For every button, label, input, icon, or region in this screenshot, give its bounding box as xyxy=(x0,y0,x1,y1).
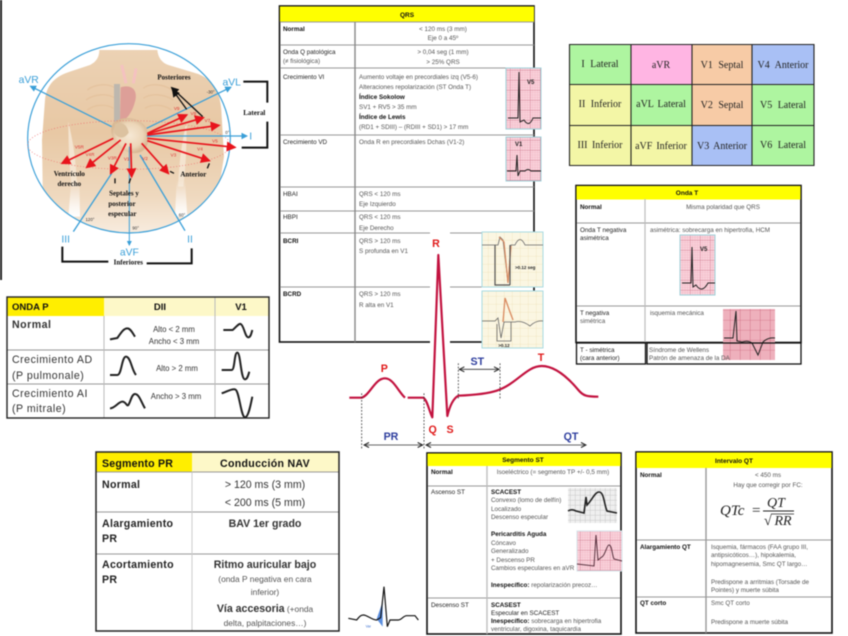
Onda P row labels: Normal xyxy=(12,319,52,331)
grid labels: V3 Anterior xyxy=(697,141,748,152)
Intervalo QT content: Predispone a arritmias (Torsade de xyxy=(711,579,809,586)
Onda P criteria xyxy=(149,325,201,401)
vector and angle tags: V3 xyxy=(170,153,177,158)
vector and angle tags: V5R xyxy=(75,145,84,150)
horizontal plane ellipse xyxy=(28,121,230,169)
vector and angle tags: -30° xyxy=(207,90,215,95)
Onda P row labels: Crecimiento AD xyxy=(12,354,93,366)
grid labels: V1 Septal xyxy=(701,60,744,71)
Segmento ST content: ventricular, digoxina, taquicardia xyxy=(491,626,581,633)
Segmento ST content: SCASEST xyxy=(491,602,521,609)
grid labels: aVL Lateral xyxy=(636,99,686,110)
lead labels xyxy=(19,75,252,259)
Onda T content: isquemia mecánica xyxy=(650,310,704,317)
territory labels: Inferiores xyxy=(114,259,143,267)
QRS row content: Alteraciones repolarización (ST Onda T) xyxy=(359,84,471,91)
Segmento ST content: Cóncavo xyxy=(491,540,516,547)
Segmento PR content: delta, palpitaciones…) xyxy=(224,618,307,628)
interval guides xyxy=(362,363,586,448)
ECG thumbnail: right ventricular growth: V1 xyxy=(515,142,523,148)
Segmento ST content: Convexo (lomo de delfín) xyxy=(491,497,561,504)
Onda T content: Onda T negativa xyxy=(580,227,627,234)
header row xyxy=(7,297,269,316)
grid labels: II Inferior xyxy=(579,99,622,110)
grid labels: I Lateral xyxy=(581,59,619,70)
QRS row labels xyxy=(283,26,336,298)
Segmento ST content: Descenso ST xyxy=(431,602,469,609)
row: T simétrica: Síndrome de Wellens xyxy=(649,347,709,354)
lead labels: I xyxy=(249,132,252,143)
Onda T content: T negativa xyxy=(580,310,610,317)
Segmento ST content xyxy=(431,469,609,633)
Segmento PR content: Ritmo auricular bajo xyxy=(214,559,317,571)
grid labels xyxy=(577,59,809,152)
inferior bracket xyxy=(62,247,192,263)
precordial vectors xyxy=(62,115,235,177)
Segmento PR content: (onda P negativa en cara xyxy=(218,574,312,584)
grid labels: V5 Lateral xyxy=(760,100,806,111)
panel: Segmento ST table xyxy=(427,453,622,634)
QRS row content: QRS > 120 ms xyxy=(359,238,400,245)
heading: Onda T: Onda T xyxy=(676,190,698,197)
heading: Intervalo QT xyxy=(636,452,832,468)
panel: lead territory grid xyxy=(570,44,814,166)
Segmento PR content: < 200 ms (5 mm) xyxy=(225,497,305,509)
vector and angle tags: V4 xyxy=(197,147,203,152)
Onda T content: Normal xyxy=(580,204,602,211)
white gap behind R wave xyxy=(430,230,450,343)
territory labels: Posteriores xyxy=(157,73,191,81)
Segmento ST content: Ascenso ST xyxy=(431,489,465,496)
ECG thumbnail: ST elevation xyxy=(568,488,617,523)
territory labels xyxy=(54,73,265,267)
grid labels: aVR xyxy=(652,60,670,71)
QRS row labels: HBPI xyxy=(283,214,298,221)
P-QRS-T waveform xyxy=(349,255,598,417)
lead labels: II xyxy=(187,234,193,245)
QRS row labels: HBAI xyxy=(283,191,298,198)
QRS row content: < 120 ms (3 mm) xyxy=(419,26,467,33)
grid labels: V2 Septal xyxy=(701,100,744,111)
ECG thumbnail: BCRI: >0.12 seg xyxy=(515,265,536,270)
header row: Segmento PR xyxy=(102,458,173,470)
wave labels: QT xyxy=(564,431,579,443)
Segmento PR content: inferior) xyxy=(251,587,279,597)
wave labels: Q xyxy=(429,424,437,436)
Onda P row labels: (P pulmonale) xyxy=(12,370,84,382)
vector and angle tags: V1 xyxy=(124,157,130,162)
QRS row content: Eje Derecho xyxy=(359,225,394,232)
formula: QTc: √ xyxy=(764,514,772,529)
wave labels: P xyxy=(381,363,388,375)
QRS row content: Índice Sokolow xyxy=(359,92,405,101)
heading: Segmento ST: Segmento ST xyxy=(502,457,544,464)
grid labels: III Inferior xyxy=(577,140,623,151)
P wave morphologies xyxy=(110,324,252,417)
Segmento ST content: Especular en SCACEST xyxy=(491,610,559,617)
Onda T content: asimétrica: sobrecarga en hipertrofia, HCM xyxy=(650,227,770,234)
formula: QTc xyxy=(720,496,794,529)
panel: Onda T table xyxy=(576,186,801,364)
Intervalo QT content: Pointes) y muerte súbita xyxy=(711,587,779,594)
Intervalo QT content: hipomagnesemia, Smc QT largo… xyxy=(711,561,807,568)
wave labels: R xyxy=(432,238,440,250)
vector and angle tags: 60° xyxy=(179,212,186,217)
Onda T content: asimétrica xyxy=(580,235,609,242)
grid labels: V6 Lateral xyxy=(760,140,806,151)
vector and angle tags xyxy=(75,90,230,231)
Onda T content: simétrica xyxy=(580,318,606,325)
row: T simétrica xyxy=(576,343,801,364)
Segmento PR content xyxy=(214,479,317,628)
formula: QTc: = xyxy=(752,503,760,519)
territory labels: Ventrículo xyxy=(54,170,85,178)
panel: QRS table xyxy=(280,6,543,348)
ECG thumbnail: right ventricular growth xyxy=(506,137,541,181)
vector and angle tags: V3R xyxy=(108,155,117,160)
Segmento PR content: > 120 ms (3 mm) xyxy=(225,479,305,491)
vector and angle tags: V5 xyxy=(212,139,218,144)
ECG thumbnail: asymmetric negative T: V5 xyxy=(700,247,708,253)
vector and angle tags: 0° xyxy=(225,130,230,135)
row: T simétrica: Patrón de amenaza de la DA xyxy=(649,355,731,362)
ECG thumbnail: BCRD xyxy=(482,291,543,348)
QRS row labels: BCRD xyxy=(283,291,302,298)
QRS row labels: Crecimiento VI xyxy=(283,74,325,81)
page edge line xyxy=(0,0,2,280)
posterior vectors xyxy=(115,88,209,183)
vector and angle tags: V4R xyxy=(85,152,95,157)
panel: Onda P table xyxy=(7,297,269,418)
wave labels xyxy=(381,238,579,443)
Intervalo QT content: Predispone a muerte súbita xyxy=(711,619,789,626)
Segmento ST content: Inespecífico: repolarización precoz… xyxy=(491,582,597,589)
Onda P row labels: Crecimiento AI xyxy=(12,388,88,400)
territory labels: Septales y xyxy=(109,189,139,197)
row: T simétrica: (cara anterior) xyxy=(580,355,620,362)
Intervalo QT content: Hay que corregir por FC: xyxy=(733,482,803,489)
wave labels: S xyxy=(446,424,454,436)
Segmento PR row labels: Normal xyxy=(102,479,140,491)
QRS row content: > 0,04 seg (1 mm) xyxy=(417,49,469,56)
territory labels: especular xyxy=(108,210,136,218)
Segmento ST content: + Descenso PR xyxy=(491,557,535,564)
Segmento PR row labels: Alargamiento xyxy=(102,518,174,530)
territory labels: derecho xyxy=(58,180,82,188)
panel: central ECG trace xyxy=(349,230,598,448)
icon: delta wave ECG: Var xyxy=(366,624,372,628)
lead labels: aVR xyxy=(19,75,39,86)
Segmento ST content: Cambios especulares en aVR xyxy=(491,565,575,572)
QRS row content: (RD1 + SDIII) – (RDIII + SD1) > 17 mm xyxy=(359,124,468,131)
vector and angle tags: V7 xyxy=(204,118,211,123)
Segmento ST content: Normal xyxy=(431,469,453,476)
ECG thumbnail: pericarditis xyxy=(577,531,622,571)
Onda T content xyxy=(580,204,770,325)
ECG thumbnail: left ventricular growth: V5 xyxy=(527,80,535,86)
panel: Intervalo QT table xyxy=(636,452,832,633)
QRS row content: QRS < 120 ms xyxy=(359,191,400,198)
frontal plane circle xyxy=(28,44,230,233)
header row: DII xyxy=(154,302,166,313)
ECG thumbnail: BCRD: >0.12 xyxy=(498,343,510,348)
lead labels: III xyxy=(61,234,70,245)
wave labels: PR xyxy=(384,431,399,443)
QRS row content: > 25% QRS xyxy=(426,59,460,66)
header row: Conducción NAV xyxy=(220,458,310,470)
row: T simétrica: T - simétrica xyxy=(580,347,615,354)
QRS row content: QRS < 120 ms xyxy=(359,214,400,221)
Segmento PR row labels xyxy=(102,479,174,586)
ECG thumbnail: asymmetric negative T xyxy=(680,235,715,295)
heading: Segmento ST xyxy=(428,454,620,466)
QRS row content: Eje 0 a 45º xyxy=(428,35,459,42)
torso illustration xyxy=(42,50,224,233)
QRS row content: SV1 + RV5 > 35 mm xyxy=(359,104,417,111)
Intervalo QT content: Smc QT corto xyxy=(711,600,750,607)
heading: QRS: QRS xyxy=(400,12,415,19)
formula: QTc: RR xyxy=(773,514,792,529)
QRS row content: Aumento voltaje en precordiales izq (V5-6) xyxy=(359,74,478,81)
QRS row content: Onda R en precordiales Dchas (V1-2) xyxy=(359,139,464,146)
QRS row labels: Crecimiento VD xyxy=(283,139,328,146)
Segmento ST content: Generalizado xyxy=(491,548,529,555)
ECG thumbnail: left ventricular growth xyxy=(506,68,541,129)
QRS row labels: Onda Q patológica xyxy=(283,49,336,56)
icon: delta wave ECG xyxy=(348,587,418,628)
ECG thumbnail: symmetric negative T xyxy=(723,309,775,360)
Segmento ST content: Pericarditis Aguda xyxy=(491,531,547,538)
Intervalo QT content: < 450 ms xyxy=(755,472,781,479)
territory labels: posterior xyxy=(108,200,136,208)
QRS row content: R alta en V1 xyxy=(359,302,394,309)
vector and angle tags: 120° xyxy=(86,217,95,222)
Onda P row labels xyxy=(12,319,93,415)
Segmento PR content: BAV 1er grado xyxy=(229,518,302,530)
QRS row labels: BCRI xyxy=(283,238,299,245)
QRS row content: QRS > 120 ms xyxy=(359,291,400,298)
vector and angle tags: V2 xyxy=(142,156,148,161)
vector and angle tags: 90° xyxy=(132,226,139,231)
QRS row labels: Normal xyxy=(283,26,305,33)
Intervalo QT content: Alargamiento QT xyxy=(640,544,691,551)
Segmento ST content: Inespecífico: sobrecarga en hipertrofia xyxy=(491,618,602,625)
heading: Intervalo QT: Intervalo QT xyxy=(715,458,753,465)
Onda P row labels: (P mitrale) xyxy=(12,403,66,415)
heading: QRS xyxy=(280,6,534,22)
panel: thorax lead diagram xyxy=(19,44,267,267)
limb lead axes xyxy=(31,86,247,245)
vector and angle tags: V9 xyxy=(174,106,180,111)
territory labels: Lateral xyxy=(243,109,265,117)
heart illustration xyxy=(111,65,148,153)
Segmento ST content: SCACEST xyxy=(491,489,521,496)
panel: Segmento PR table xyxy=(96,452,339,631)
QRS row content xyxy=(359,26,478,309)
Intervalo QT content: Normal xyxy=(640,472,662,479)
Intervalo QT content: Isquemia, fármacos (FAA grupo III, xyxy=(711,544,808,551)
ECG thumbnail: BCRI xyxy=(482,232,543,287)
formula: QTc: QT xyxy=(767,496,786,511)
lead labels: aVF xyxy=(120,248,139,259)
Intervalo QT content xyxy=(640,472,809,626)
Intervalo QT content: antipsicóticos…), hipokalemia, xyxy=(711,552,796,559)
formula: QTc: QTc xyxy=(720,503,745,519)
Segmento ST content: Descenso especular xyxy=(491,514,548,521)
Intervalo QT content: QT corto xyxy=(640,600,666,607)
Segmento ST content: Localizado xyxy=(491,506,522,513)
grid labels: aVF Inferior xyxy=(635,141,688,152)
QRS row content: S profunda en V1 xyxy=(359,248,409,255)
Onda T content: Misma polaridad que QRS xyxy=(686,204,760,211)
wave labels: ST xyxy=(471,356,485,368)
Onda P criteria: Ancho < 3 mm xyxy=(149,337,199,346)
QRS row labels: (≠ fisiológica) xyxy=(283,58,320,65)
header row: ONDA P xyxy=(12,302,49,313)
Onda P criteria: Alto < 2 mm xyxy=(153,325,195,334)
QRS row content: Índice de Lewis xyxy=(359,112,406,121)
heading: Onda T xyxy=(576,186,800,200)
lead labels: aVL xyxy=(222,77,241,88)
wave labels: T xyxy=(538,352,545,364)
header row: V1 xyxy=(235,302,248,313)
territory labels: Anterior xyxy=(180,171,206,179)
Onda P criteria: Alto > 2 mm xyxy=(156,364,198,373)
Segmento PR content: Vía accesoria (+onda xyxy=(217,603,314,615)
vector and angle tags: V8 xyxy=(190,111,197,116)
Segmento ST content: Isoeléctrico (= segmento TP +/- 0,5 mm) xyxy=(497,469,609,476)
Onda P criteria: Ancho > 3 mm xyxy=(151,392,201,401)
Segmento PR row labels: PR xyxy=(102,574,117,586)
QRS row content: Eje Izquierdo xyxy=(359,201,396,208)
grid labels: V4 Anterior xyxy=(757,60,809,71)
Segmento PR row labels: Acortamiento xyxy=(102,559,174,571)
lateral bracket xyxy=(242,82,267,148)
header row xyxy=(96,452,339,472)
Segmento PR row labels: PR xyxy=(102,533,117,545)
